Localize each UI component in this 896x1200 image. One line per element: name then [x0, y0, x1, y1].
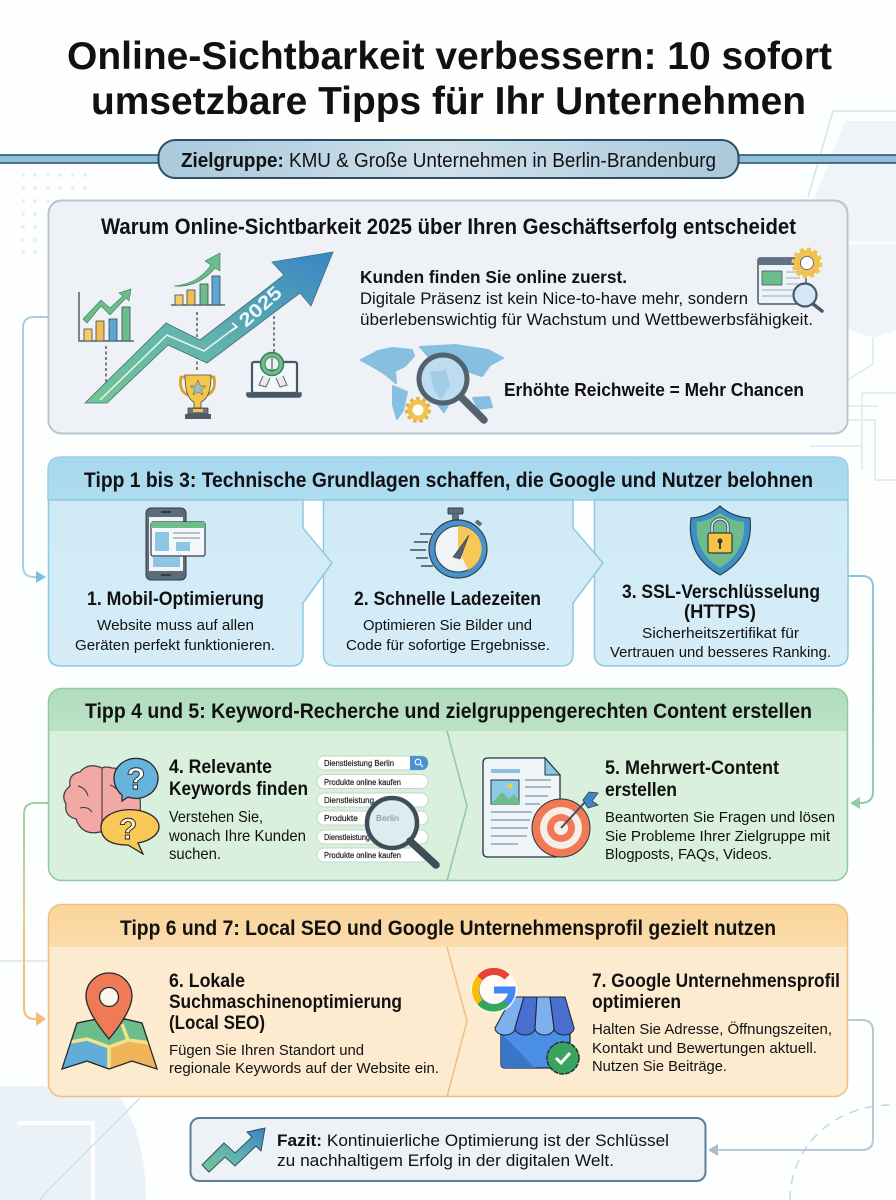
icon: world map with magnifier [361, 345, 503, 422]
text: tip 4 [168, 757, 308, 863]
search bars with magnifier: Produkte [324, 814, 359, 823]
title: umsetzbare Tipps für Ihr Unternehmen [91, 80, 806, 123]
icon: growth arrow small [202, 1128, 265, 1172]
icon: laptop with badge [247, 352, 301, 397]
icon: phone and browser [146, 508, 205, 580]
heading band: tips 4 and 5: Tipp 4 und 5: Keyword-Recherche und zielgruppengerechten Content erstellen [85, 699, 812, 723]
icon: google storefront [471, 967, 579, 1074]
heading band: tips 1 to 3: Tipp 1 bis 3: Technische Grundlagen schaffen, die Google und Nutzer belohnen [84, 468, 813, 492]
audience banner [0, 140, 896, 178]
search bars with magnifier: Dienstleistung [324, 796, 374, 805]
connector: intro to tips 1-3 [23, 317, 48, 583]
search bars with magnifier: Produkte online kaufen [324, 851, 401, 860]
text: customers find you online [360, 267, 813, 329]
text: tip 1 [75, 589, 275, 654]
heading band: tips 1 to 3 [48, 457, 848, 500]
heading: why: Warum Online-Sichtbarkeit 2025 über Ihren Geschäftserfolg entscheidet [101, 214, 796, 239]
text: tip 4: suchen. [169, 846, 221, 863]
connector: tip 7 to conclusion [708, 1020, 873, 1156]
text: tip 3: (HTTPS) [684, 602, 756, 623]
text: tip 6: (Local SEO) [169, 1013, 265, 1034]
icon: growth arrow 2025: 2025 [235, 282, 287, 332]
text: tip 5: Sie Probleme Ihrer Zielgruppe mit [605, 828, 831, 845]
text: tip 7: Nutzen Sie Beiträge. [592, 1058, 727, 1075]
search bars with magnifier: Dienstleistung [324, 833, 370, 842]
heading band: tips 6 and 7 [48, 904, 848, 947]
text: conclusion [277, 1132, 669, 1170]
text: tip 2: Code für sofortige Ergebnisse. [346, 638, 550, 654]
card: tip 3 SSL [594, 500, 848, 666]
text: tip 6 [169, 971, 439, 1077]
text: tip 6: Suchmaschinenoptimierung [169, 992, 402, 1013]
text: tip 5 [605, 758, 835, 863]
text: tip 3: Sicherheitszertifikat für [642, 626, 799, 642]
text: tip 2: Optimieren Sie Bilder und [363, 618, 532, 634]
text: tip 7: Kontakt und Bewertungen aktuell. [592, 1040, 817, 1057]
icon: stopwatch [410, 508, 487, 578]
background decoration: top right hexagon [808, 111, 896, 480]
icon: trophy [180, 375, 215, 419]
panel: tips 1 to 3 [48, 457, 848, 666]
text: tip 1: Geräten perfekt funktionieren. [75, 638, 275, 654]
background decoration: dot grid [21, 173, 87, 254]
connector: tip 3 to tip 5 [848, 576, 873, 809]
text: tip 4: 4. Relevante [169, 757, 272, 778]
card: tip 2 loading times [324, 500, 603, 666]
text: tip 5: erstellen [605, 780, 677, 801]
text: tip 3 [610, 582, 831, 661]
text: tip 5: Blogposts, FAQs, Videos. [605, 846, 772, 863]
title: Online-Sichtbarkeit verbessern: 10 sofort [67, 35, 832, 78]
icon: document with target [483, 758, 598, 857]
text: customers find you online: Kunden finden Sie online zuerst. [360, 267, 627, 287]
text: tip 6: regionale Keywords auf der Website ein. [169, 1060, 439, 1077]
icon: map with pin [62, 973, 157, 1069]
text: tip 4: Verstehen Sie, [169, 809, 263, 826]
background decoration: dashed arc [790, 1105, 892, 1200]
heading band: tips 6 and 7: Tipp 6 und 7: Local SEO und Google Unternehmensprofil gezielt nutzen [120, 916, 776, 940]
search bars with magnifier: Dienstleistung Berlin [324, 759, 394, 768]
text: customers find you online: überlebenswichtig für Wachstum und Wettbewerbsfähigkeit. [360, 311, 813, 329]
text: tip 7: 7. Google Unternehmensprofil [592, 971, 840, 992]
text: tip 3: Vertrauen und besseres Ranking. [610, 645, 831, 661]
title [67, 35, 832, 123]
search bars with magnifier: Produkte online kaufen [324, 778, 401, 787]
text: tip 5: Beantworten Sie Fragen und lösen [605, 809, 835, 826]
text: conclusion: zu nachhaltigem Erfolg in der digitalen Welt. [277, 1152, 614, 1170]
text: tip 6: 6. Lokale [169, 971, 245, 992]
text: tip 4: Keywords finden [169, 779, 308, 800]
audience banner: Zielgruppe: KMU & Große Unternehmen in Berlin-Brandenburg [181, 149, 716, 172]
text: tip 2 [346, 589, 550, 654]
text: tip 7 [592, 971, 840, 1075]
text: tip 5: 5. Mehrwert-Content [605, 758, 780, 779]
text: tip 1: 1. Mobil-Optimierung [87, 589, 264, 610]
panel: why online visibility [48, 200, 848, 434]
icon: shield with lock [690, 506, 750, 575]
text: conclusion: Fazit: Kontinuierliche Optimierung ist der Schlüssel [277, 1132, 669, 1150]
text: more reach: Erhöhte Reichweite = Mehr Chancen [504, 380, 804, 400]
heading band: tips 4 and 5 [48, 688, 848, 731]
text: customers find you online: Digitale Präsenz ist kein Nice-to-have mehr, sondern [360, 290, 748, 308]
panel: conclusion [190, 1118, 706, 1181]
icon: brain with question bubbles: ? [127, 761, 145, 796]
connector: tip 4 to tip 6 [24, 803, 48, 1026]
text: tip 3: 3. SSL-Verschlüsselung [622, 582, 820, 603]
search bars with magnifier [317, 756, 436, 865]
icon: browser with gear and magnifier [758, 249, 822, 311]
text: tip 1: Website muss auf allen [97, 618, 254, 634]
text: tip 2: 2. Schnelle Ladezeiten [354, 589, 541, 610]
icon: growth arrow 2025 [85, 252, 333, 403]
icon: bar chart top [171, 253, 225, 305]
text: tip 7: Halten Sie Adresse, Öffnungszeiten, [592, 1020, 832, 1038]
panel: tips 4 and 5 [48, 688, 848, 881]
background decoration: bottom left shape [0, 961, 146, 1200]
icon: bar chart left [79, 289, 134, 341]
text: tip 4: wonach Ihre Kunden [168, 828, 306, 845]
text: tip 7: optimieren [592, 992, 681, 1013]
card: tip 1 mobile optimization [48, 500, 332, 666]
icon: brain with question bubbles: ? [119, 813, 137, 846]
panel: tips 6 and 7 [48, 904, 848, 1097]
search bars with magnifier: Berlin [376, 814, 399, 823]
text: tip 6: Fügen Sie Ihren Standort und [169, 1042, 364, 1059]
icon: brain with question bubbles [64, 758, 159, 854]
